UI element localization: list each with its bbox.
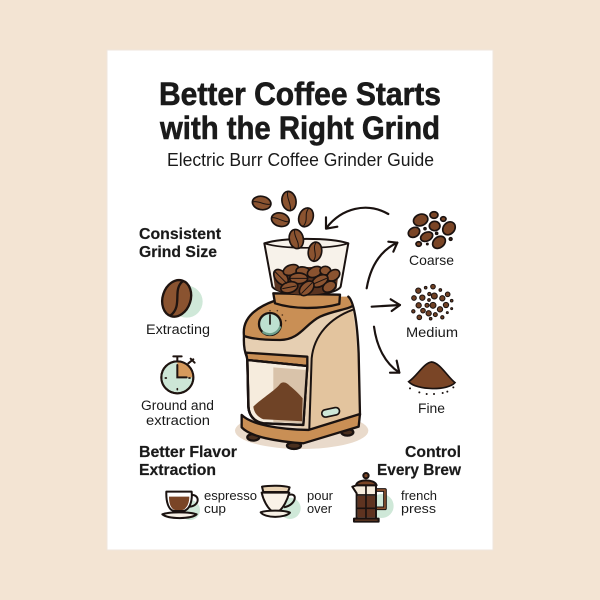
heading: consistent grind size [139, 226, 221, 261]
heading: control every brew: Control [405, 444, 461, 461]
label: french press: press [401, 502, 436, 516]
icon: pour over dripper [261, 486, 301, 519]
label: ground and extraction [141, 398, 214, 428]
icon: stopwatch [161, 356, 195, 393]
label: extracting: Extracting [146, 322, 210, 337]
icon: espresso cup [162, 492, 200, 520]
heading: better flavor extraction: Extraction [139, 462, 216, 479]
heading: better flavor extraction [139, 444, 237, 479]
icon: fine grounds pile [409, 362, 455, 394]
label: ground and extraction: Ground and [141, 398, 214, 413]
arrow: beans into hopper [326, 208, 388, 229]
label: pour over: over [307, 502, 332, 516]
arrow: to medium [372, 299, 400, 311]
label: coarse: Coarse [409, 252, 454, 268]
label: espresso cup: espresso [204, 489, 257, 503]
label: fine: Fine [418, 400, 445, 416]
title: with the Right Grind [159, 110, 440, 146]
label: medium: Medium [406, 324, 458, 340]
arrow: to coarse [367, 242, 397, 288]
icon: coarse grounds [406, 212, 458, 251]
icon: whole coffee bean [158, 276, 203, 320]
label: pour over [307, 489, 333, 516]
label: espresso cup [204, 489, 257, 516]
heading: consistent grind size: Consistent [139, 226, 221, 243]
heading: control every brew: Every Brew [377, 462, 462, 479]
arrow: to fine [374, 327, 399, 373]
label: pour over: pour [307, 489, 333, 503]
panel: white card [107, 50, 493, 550]
icon: electric burr grinder [235, 190, 368, 449]
title [159, 76, 441, 146]
label: french press [401, 489, 437, 516]
title: Better Coffee Starts [159, 76, 441, 112]
heading: control every brew [377, 444, 462, 479]
label: ground and extraction: extraction [146, 413, 210, 428]
heading: consistent grind size: Grind Size [139, 244, 217, 261]
icon: medium grounds [412, 284, 453, 320]
heading: better flavor extraction: Better Flavor [139, 444, 237, 461]
label: french press: french [401, 489, 437, 503]
beans in hopper [271, 263, 342, 298]
subtitle: Electric Burr Coffee Grinder Guide [167, 150, 434, 170]
icon: french press [352, 473, 394, 522]
label: espresso cup: cup [204, 502, 226, 516]
